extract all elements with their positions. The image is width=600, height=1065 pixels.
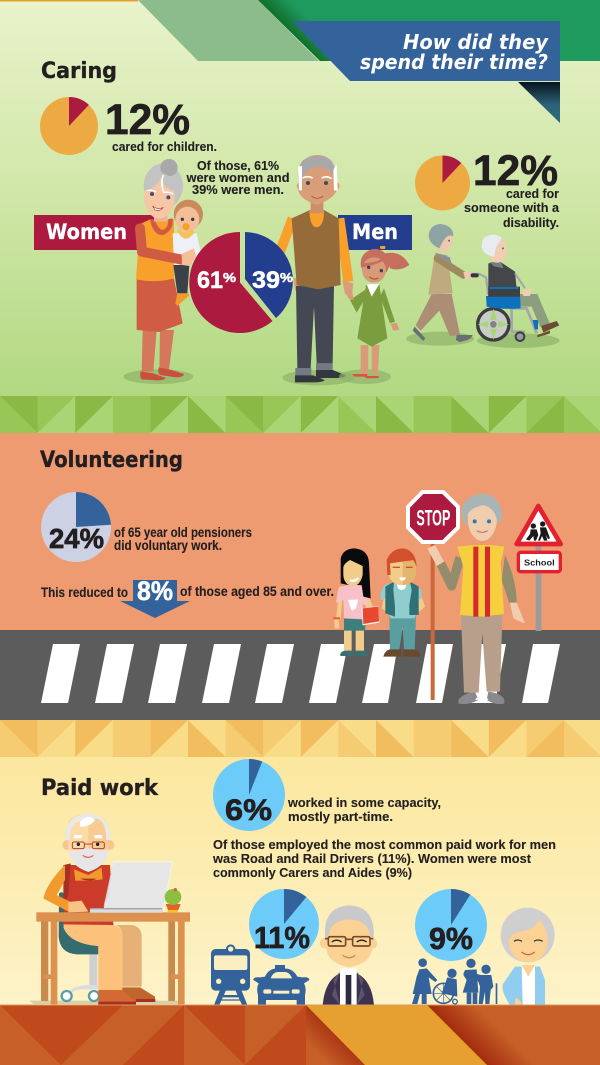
text: most common paid work: was Road and Rail Drivers (11%). Women were most bbox=[212, 851, 532, 866]
text: most common paid work bbox=[212, 837, 556, 880]
icon: train bbox=[211, 944, 250, 1005]
pie: 12% cared for someone with a disability bbox=[415, 156, 470, 210]
panel: paid work background bbox=[0, 720, 600, 1006]
illustration: man with glasses bbox=[320, 905, 377, 1005]
pie: 6% in paid work: 6% bbox=[225, 794, 272, 827]
panel: caring background bbox=[0, 0, 600, 434]
illustration: grandfather bbox=[280, 155, 354, 385]
heading: Caring: Caring bbox=[41, 59, 117, 84]
pie: 9% carers and aides: 9% bbox=[429, 921, 473, 956]
illustration: smiling woman bbox=[501, 908, 555, 1005]
pie chart: women 61% men 39%: 39 bbox=[252, 267, 280, 294]
icon: taxi bbox=[253, 965, 309, 1005]
pie: 12% cared for children bbox=[40, 97, 98, 155]
text: gender split: 39% were men. bbox=[192, 182, 284, 197]
heading: Paid work: Paid work bbox=[41, 776, 159, 801]
road bbox=[0, 630, 600, 720]
green triangle band bbox=[0, 396, 600, 433]
stat: 12% cared for children: 12% bbox=[105, 96, 190, 144]
pie: 9% carers and aides bbox=[415, 889, 487, 961]
pie: 6% in paid work bbox=[213, 759, 285, 831]
stat: 12% disability: someone with a bbox=[464, 200, 560, 215]
pedestrian crossing bbox=[41, 644, 560, 703]
pie: 24% volunteering: 24% bbox=[49, 523, 104, 554]
stat: 12% cared for children bbox=[105, 96, 217, 154]
text: gender split: Of those, 61% bbox=[197, 158, 279, 173]
title: How did they bbox=[403, 30, 550, 54]
illustration: school boy bbox=[381, 548, 425, 657]
text: gender split bbox=[186, 158, 290, 197]
text: worked in some capacity: worked in some capacity, bbox=[287, 795, 441, 810]
text: voluntary work: did voluntary work. bbox=[114, 538, 222, 553]
stat: 12% disability: 12% bbox=[473, 147, 558, 195]
text: voluntary work bbox=[114, 525, 252, 553]
pie: 11% road and rail drivers bbox=[249, 889, 319, 959]
stat: 12% cared for children: cared for children. bbox=[112, 139, 217, 154]
school sign bbox=[517, 506, 561, 631]
footer band bbox=[0, 1004, 600, 1065]
text: gender split: were women and bbox=[186, 170, 290, 185]
title bbox=[360, 30, 550, 74]
stat: 12% disability: disability. bbox=[503, 215, 559, 230]
panel: volunteering background bbox=[0, 433, 600, 630]
text: worked in some capacity bbox=[287, 795, 441, 824]
arrow: 8% bbox=[120, 576, 190, 618]
label: Men: Men bbox=[352, 220, 398, 244]
stat: 12% disability bbox=[464, 147, 560, 230]
illustration: carer pushing wheelchair bbox=[406, 224, 560, 348]
pie: 11% road and rail drivers: 11% bbox=[254, 920, 310, 955]
illustration: crossing guard with stop sign bbox=[441, 494, 525, 704]
text: most common paid work: commonly Carers and Aides (9%) bbox=[213, 865, 412, 880]
heading: Volunteering: Volunteering bbox=[40, 448, 183, 473]
illustration: grandmother holding baby bbox=[123, 159, 203, 384]
illustration: granddaughter bbox=[339, 246, 409, 384]
illustration: school girl bbox=[333, 548, 379, 656]
pie: 24% volunteering bbox=[41, 492, 111, 562]
illustration: man at laptop bbox=[29, 813, 190, 1005]
text: this reduced to: This reduced to bbox=[41, 585, 128, 600]
title: spend their time? bbox=[360, 50, 548, 74]
text: most common paid work: Of those employed the most common paid work for men bbox=[213, 837, 556, 852]
stop sign: STOP bbox=[416, 505, 450, 530]
icon: carers silhouettes bbox=[412, 958, 497, 1004]
label: Men bbox=[338, 215, 412, 250]
top header ribbons bbox=[0, 0, 600, 123]
pie chart: women 61% men 39%: 61 bbox=[197, 267, 223, 294]
school sign: School bbox=[524, 558, 555, 568]
stat: 12% disability: cared for bbox=[506, 186, 559, 201]
pie chart: women 61% men 39% bbox=[189, 232, 293, 333]
text: aged 85 and over: of those aged 85 and over. bbox=[180, 584, 334, 599]
arrow: 8%: 8% bbox=[137, 576, 173, 606]
pie chart: women 61% men 39%: % bbox=[223, 270, 236, 285]
label: Women: Women bbox=[46, 220, 127, 244]
yellow triangle band bbox=[0, 720, 600, 757]
pie chart: women 61% men 39%: % bbox=[280, 270, 293, 285]
text: worked in some capacity: mostly part-time. bbox=[288, 809, 393, 824]
text: voluntary work: of 65 year old pensioners bbox=[114, 525, 252, 540]
label: Women bbox=[34, 215, 156, 250]
stop sign bbox=[406, 490, 460, 700]
